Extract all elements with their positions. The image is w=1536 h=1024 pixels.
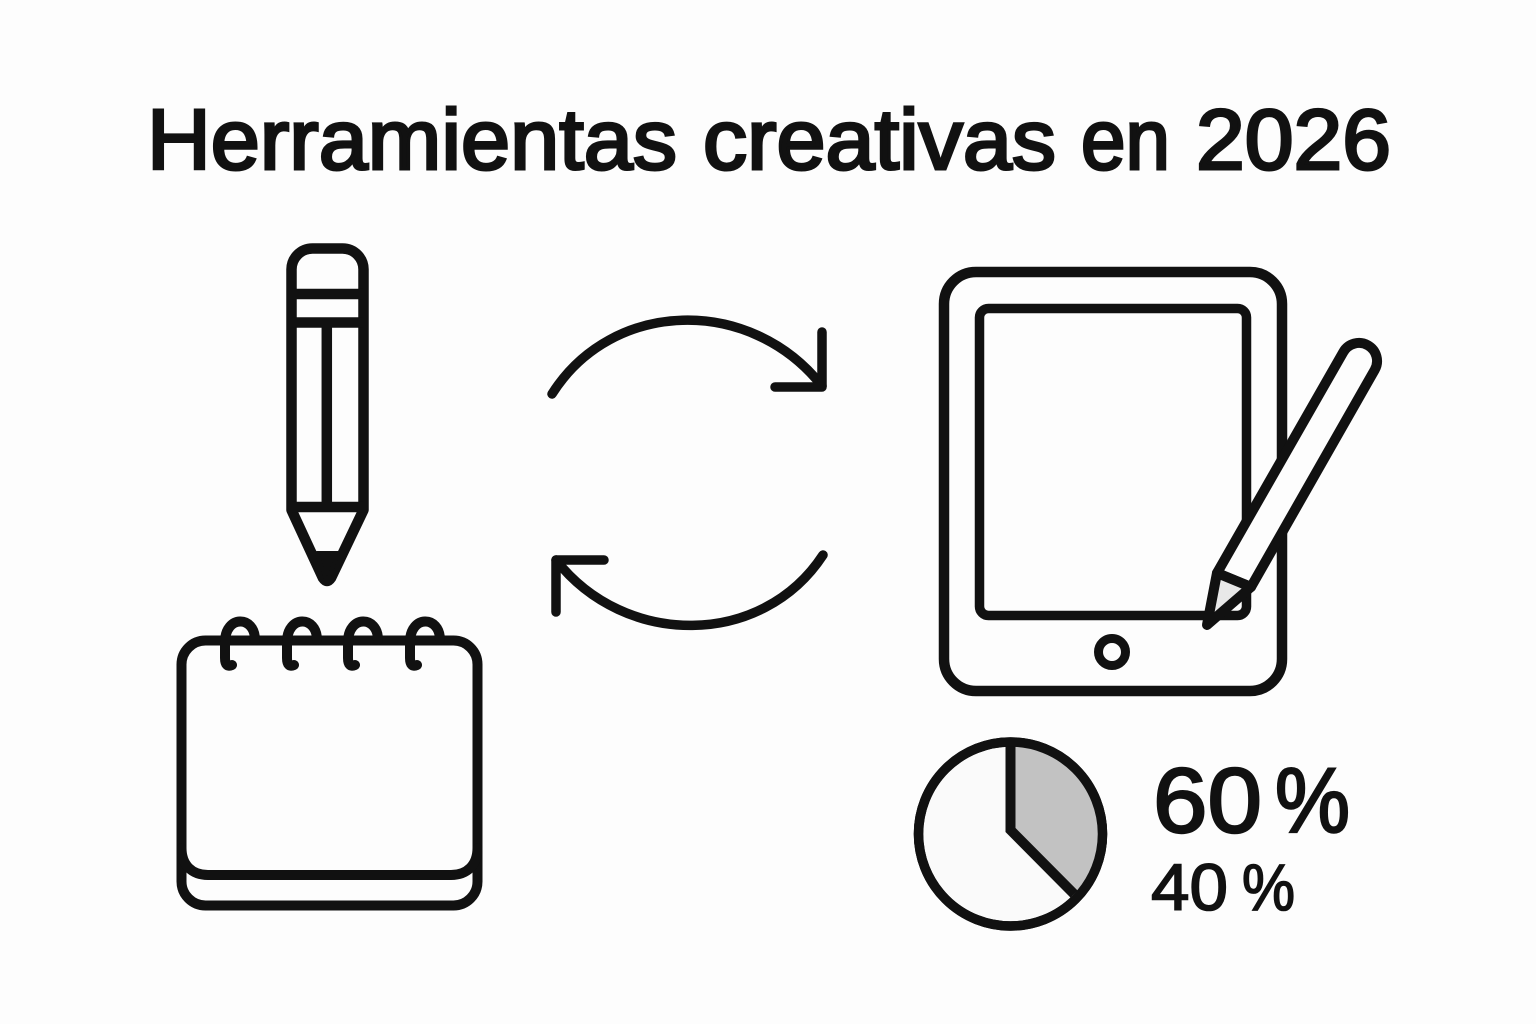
stat: 60 %: %: [1275, 750, 1350, 852]
icon: pencil: [291, 248, 364, 582]
title: Herramientas: [147, 93, 677, 188]
stat: 40 %: 40: [1151, 850, 1228, 924]
stat: 60 %: 60: [1153, 750, 1262, 852]
icon: spiral notebook: [182, 621, 478, 906]
pie chart: [918, 742, 1102, 926]
icon: tablet: [944, 272, 1282, 691]
icon: stylus: [1207, 343, 1377, 625]
title: en: [1081, 93, 1170, 188]
title: 2026: [1196, 93, 1391, 188]
notebook rings: [225, 621, 440, 666]
stat: 40 %: %: [1242, 850, 1295, 924]
title: creativas: [703, 93, 1056, 188]
tablet home button: [1098, 638, 1126, 666]
arrow: top cycle arrow: [552, 320, 822, 394]
arrow: bottom cycle arrow: [556, 555, 823, 625]
